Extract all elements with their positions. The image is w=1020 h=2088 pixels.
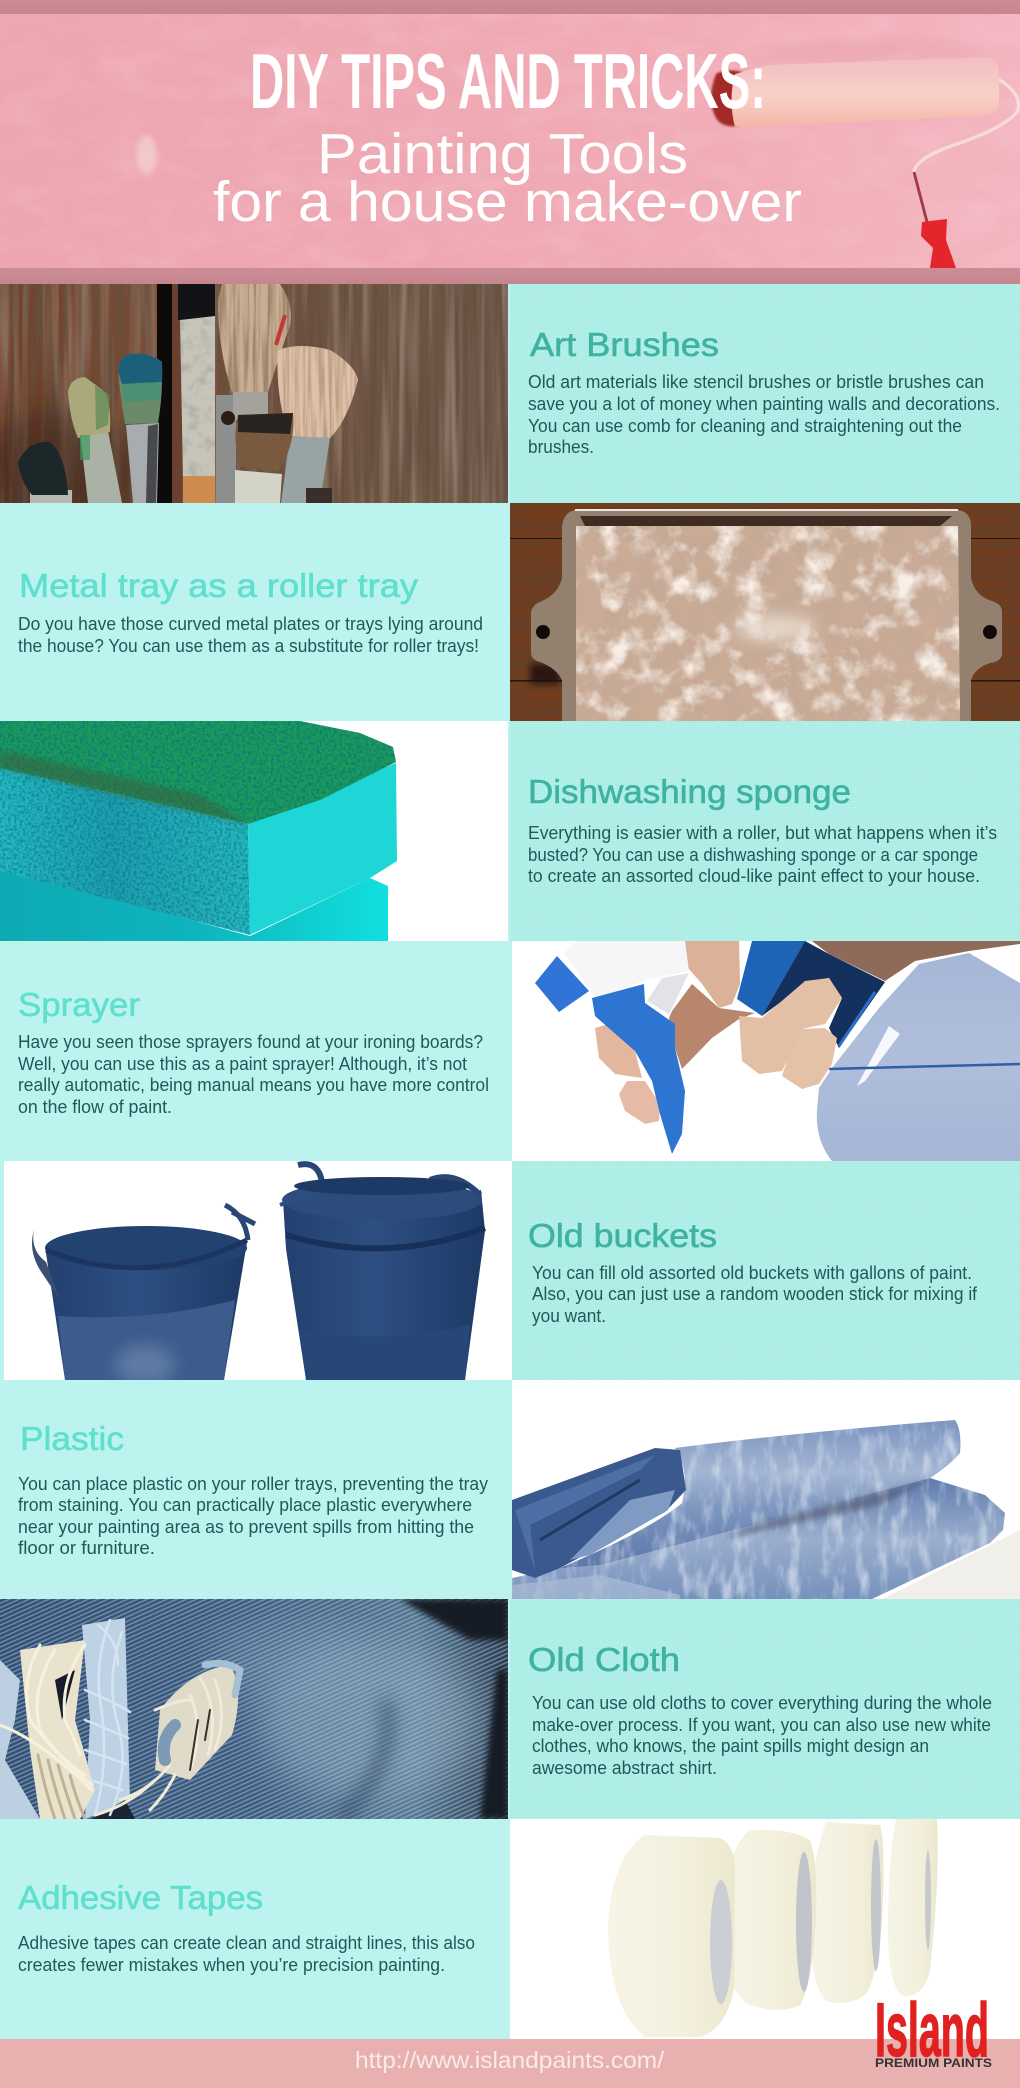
heading: metal tray: Metal tray as a roller tray: [19, 567, 419, 604]
panel: plastic sheet photo: [512, 1380, 1020, 1600]
icon: paint roller: [711, 57, 1019, 268]
palm: [669, 984, 755, 1069]
icon: frayed threads, left hole: [0, 1618, 240, 1819]
heading: dishwashing sponge: Dishwashing sponge: [528, 773, 851, 810]
panel: art brushes text: [510, 284, 1020, 503]
panel: old buckets photo: [4, 1161, 512, 1385]
panel: metal tray text: [0, 503, 510, 721]
body: plastic: near your painting area as to prevent spills from hitting the: [18, 1517, 474, 1537]
footer url: http://www.islandpaints.com/: [355, 2047, 665, 2073]
body: old buckets: you want.: [532, 1306, 606, 1326]
body: dishwashing sponge: Everything is easier with a roller, but what happens when it’s: [528, 823, 997, 843]
footer bar: [0, 2039, 1020, 2088]
body: sprayer: really automatic, being manual means you have more control: [18, 1075, 489, 1095]
body: art brushes: Old art materials like stencil brushes or bristle brushes can: [528, 372, 984, 392]
hand back: [812, 941, 1020, 981]
nozzle: [535, 956, 589, 1012]
heading: old cloth: Old Cloth: [528, 1641, 680, 1678]
icon: spray bottle with hand: [535, 941, 1020, 1161]
icon: left bucket: [32, 1205, 255, 1385]
white head: [564, 941, 689, 998]
heading: plastic: Plastic: [20, 1420, 124, 1457]
body: art brushes: You can use comb for cleaning and straightening out the: [528, 416, 962, 436]
icon: long flat brush: [178, 284, 215, 503]
trigger: [592, 984, 685, 1154]
heading: art brushes: Art Brushes: [530, 326, 719, 363]
icon: folded plastic tarp: [512, 1420, 1005, 1600]
body: sprayer: [18, 1032, 489, 1117]
sprayer neck: [737, 941, 885, 1048]
panel: old buckets text: [512, 1161, 1020, 1380]
body: old cloth: [532, 1693, 992, 1778]
body: art brushes: save you a lot of money when painting walls and decorations.: [528, 394, 1000, 414]
icon: masking tape rolls: [608, 1819, 938, 2037]
heading: old buckets: Old buckets: [528, 1217, 717, 1254]
body: old buckets: Also, you can just use a random wooden stick for mixing if: [532, 1284, 978, 1304]
body: plastic: from staining. You can practically place plastic everywhere: [18, 1495, 472, 1515]
body: art brushes: [528, 372, 1000, 457]
title: for a house make-over: [213, 170, 802, 234]
icon: metal tray: [531, 510, 1002, 721]
body: adhesive tapes: creates fewer mistakes when you’re precision painting.: [18, 1955, 445, 1975]
body: plastic: floor or furniture.: [18, 1538, 155, 1558]
panel: old cloth photo: [0, 1599, 508, 1819]
panel: adhesive tapes text: [0, 1819, 510, 2039]
panel: old cloth text: [510, 1599, 1020, 1819]
icon: big natural brush: [216, 284, 291, 503]
body: plastic: You can place plastic on your roller trays, preventing the tray: [18, 1474, 488, 1494]
hero wall photo with paint roller: [0, 14, 1020, 268]
icon: frayed threads, right hole: [155, 1665, 238, 1780]
icon: teal brush: [118, 354, 162, 503]
panel: sponge photo: [0, 721, 508, 941]
logo: Island Premium Paints: PREMIUM PAINTS: [875, 2058, 992, 2070]
header banner: [0, 0, 1020, 284]
body: adhesive tapes: Adhesive tapes can create clean and straight lines, this also: [18, 1933, 475, 1953]
panel: metal tray photo: [510, 503, 1020, 721]
heading: adhesive tapes: Adhesive Tapes: [18, 1879, 263, 1916]
body: metal tray: the house? You can use them as a substitute for roller trays!: [18, 636, 479, 656]
body: old cloth: make-over process. If you want, you can also use new white: [532, 1715, 991, 1735]
body: sprayer: on the flow of paint.: [18, 1097, 172, 1117]
title: [213, 37, 802, 234]
body: metal tray: [18, 614, 483, 656]
panel: sprayer text: [0, 941, 512, 1161]
panel: adhesive tapes photo: [510, 1819, 1020, 2039]
body: metal tray: Do you have those curved metal plates or trays lying around: [18, 614, 483, 634]
icon: green paint brush: [68, 377, 122, 503]
panel: art brushes photo: [0, 284, 508, 503]
body: dishwashing sponge: busted? You can use a dishwashing sponge or a car sponge: [528, 845, 978, 865]
body: old cloth: clothes, who knows, the paint spills might design an: [532, 1736, 929, 1756]
panel: plastic text: [0, 1380, 512, 1599]
body: sprayer: Have you seen those sprayers found at your ironing boards?: [18, 1032, 483, 1052]
body: adhesive tapes: [18, 1933, 475, 1975]
panel: dishwashing sponge text: [510, 721, 1020, 941]
body: sprayer: Well, you can use this as a paint sprayer! Although, it’s not: [18, 1054, 467, 1074]
title: Painting Tools: [317, 122, 688, 186]
body: dishwashing sponge: [528, 823, 997, 886]
body: old buckets: [532, 1263, 978, 1326]
icon: right stacked buckets: [280, 1164, 485, 1380]
body: art brushes: brushes.: [528, 437, 594, 457]
body: old cloth: You can use old cloths to cover everything during the whole: [532, 1693, 992, 1713]
body: old cloth: awesome abstract shirt.: [532, 1758, 717, 1778]
body: dishwashing sponge: to create an assorted cloud-like paint effect to your house.: [528, 866, 980, 886]
icon: pale pink brush: [277, 346, 358, 503]
bottle: [817, 953, 1020, 1161]
body: old buckets: You can fill old assorted old buckets with gallons of paint.: [532, 1263, 972, 1283]
thumb: [685, 941, 740, 1008]
body: plastic: [18, 1474, 488, 1558]
heading: sprayer: Sprayer: [18, 986, 140, 1023]
icon: short dark brush: [221, 411, 332, 503]
icon: sponge: [0, 721, 397, 941]
panel: sprayer photo: [512, 941, 1020, 1161]
icon: dark brush: [18, 442, 72, 506]
